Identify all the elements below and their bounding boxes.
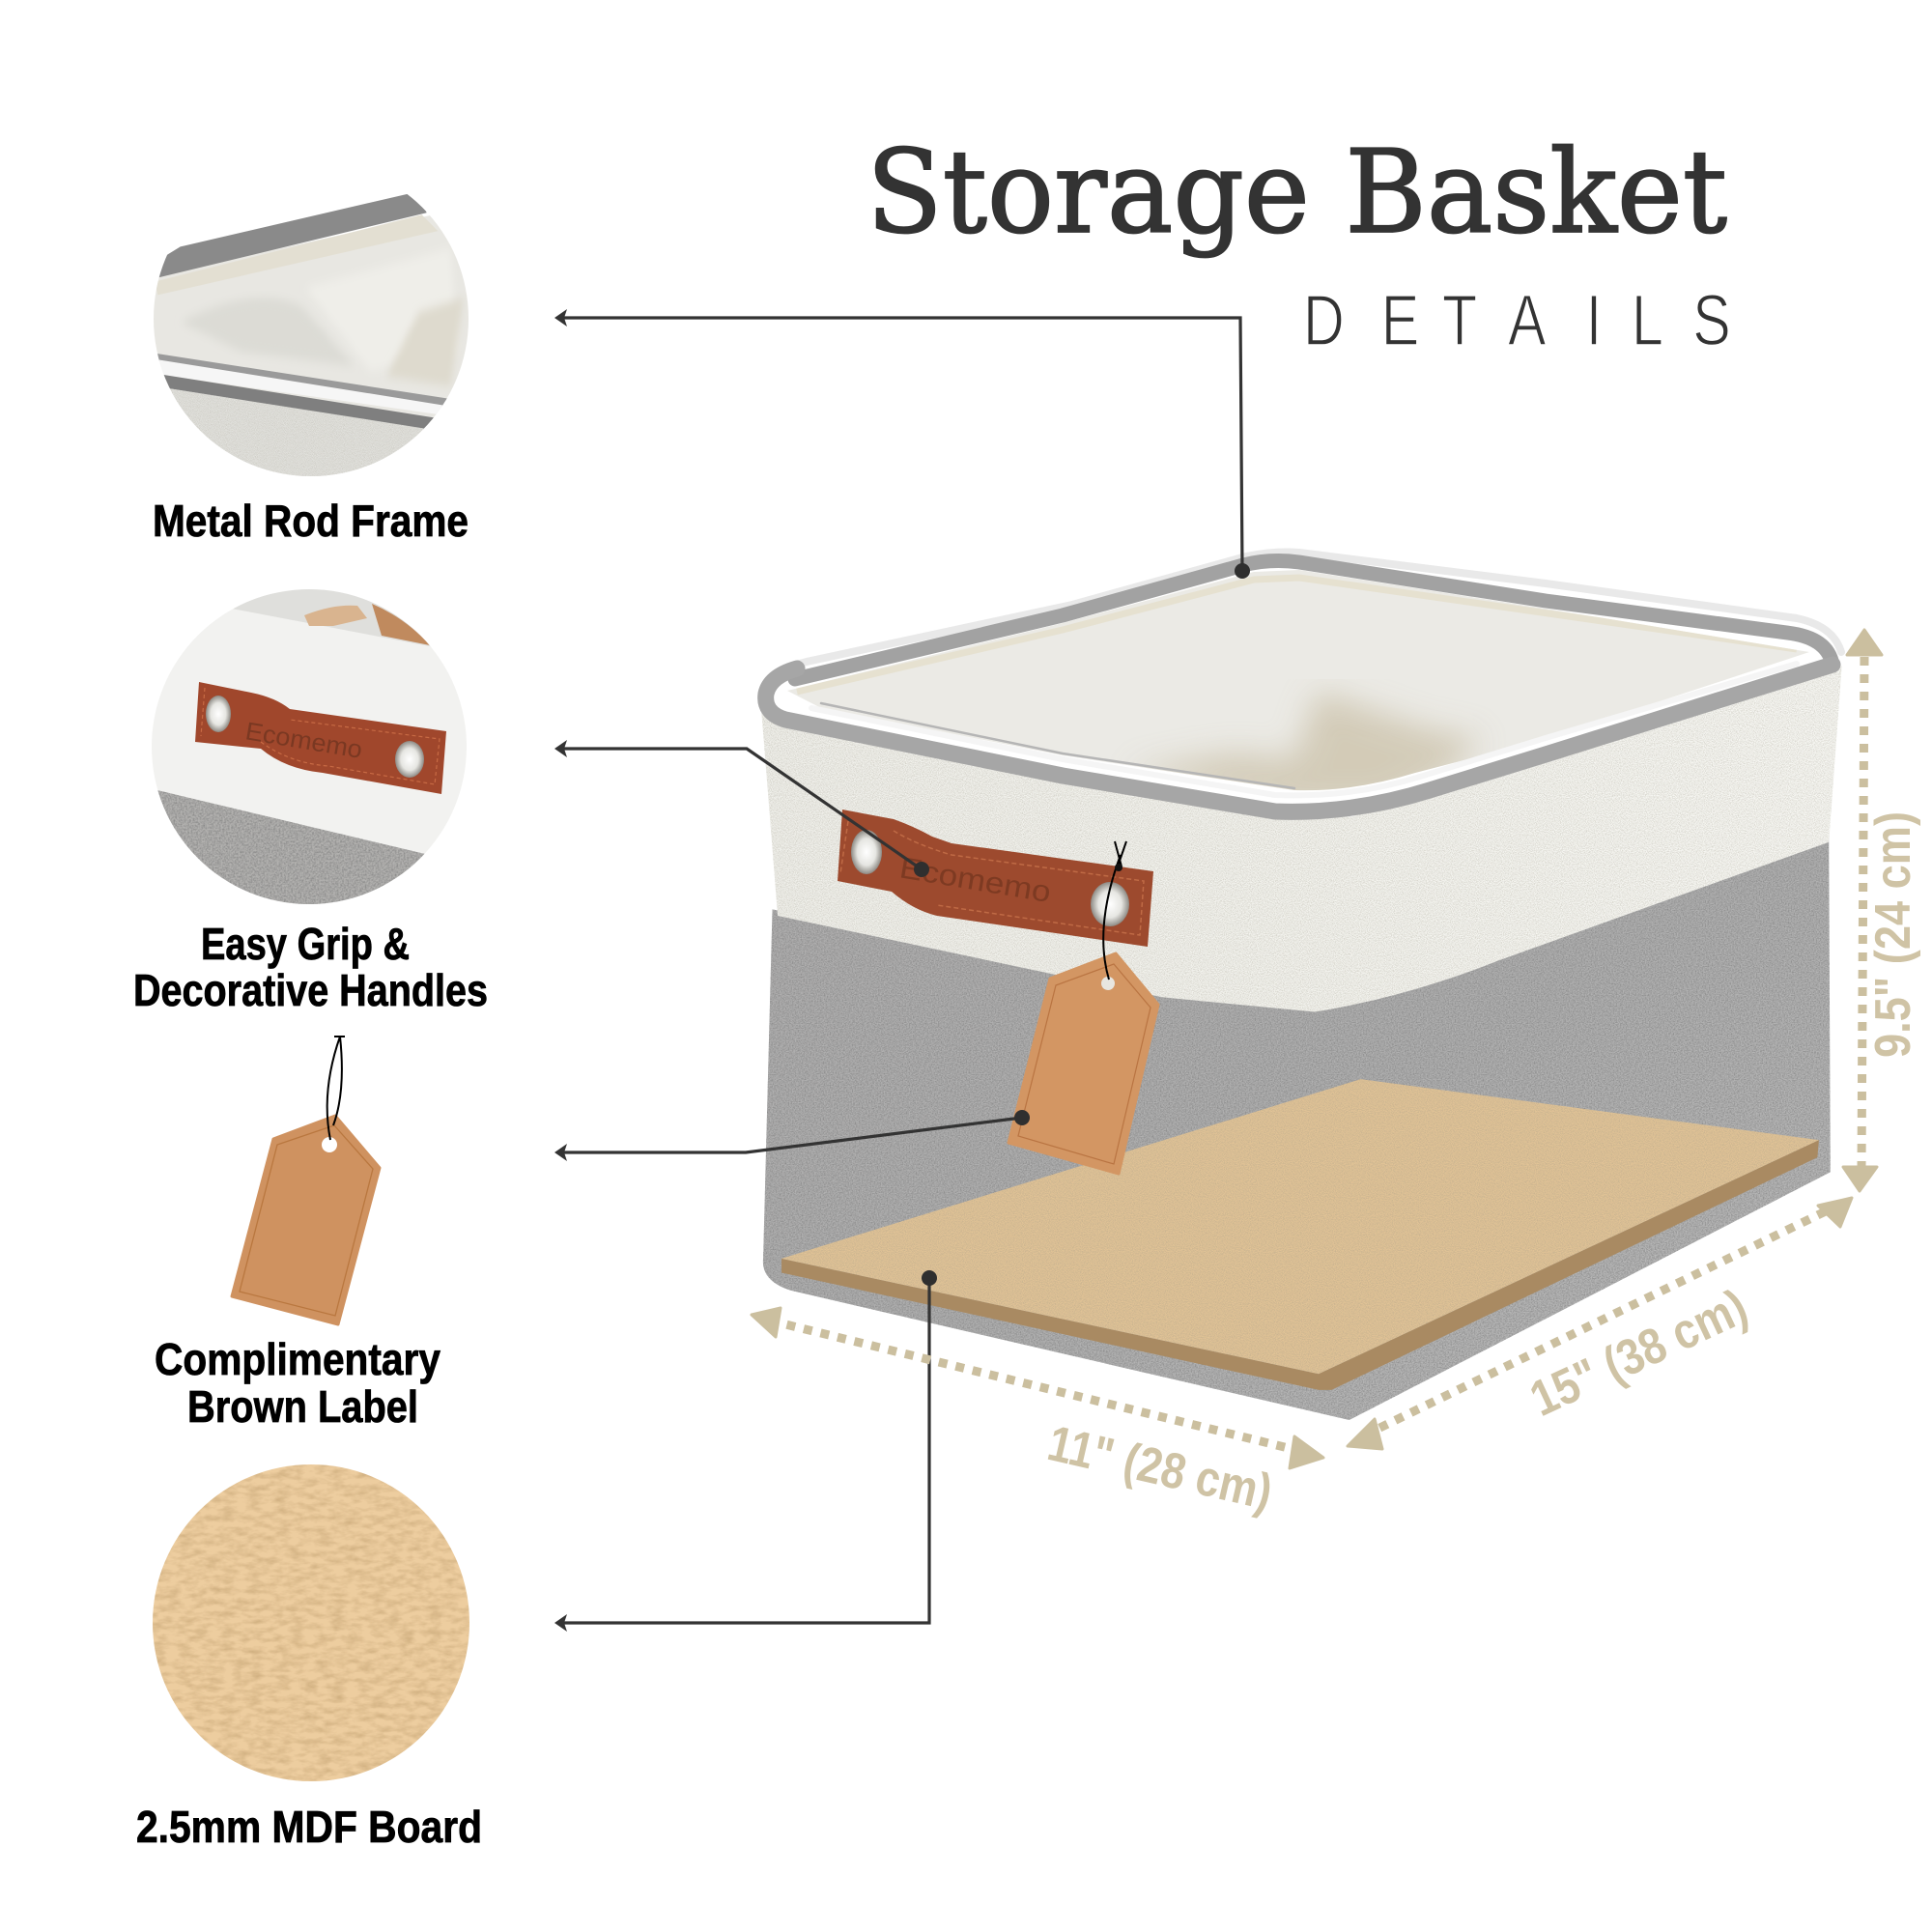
width text: 11" (28 cm): [1042, 1415, 1277, 1521]
label: MDF board: 2.5mm MDF Board: [136, 1802, 482, 1852]
detail circle: MDF: [153, 1464, 469, 1781]
label: handles: [133, 919, 488, 1015]
panel: metal rod frame: [145, 194, 483, 546]
basket fabric, local coordinates: [760, 666, 1842, 1420]
dimension: height: [1843, 630, 1921, 1191]
callout: label: [554, 1110, 1030, 1161]
dimension: width: [752, 1308, 1323, 1521]
basket white fabric band: [760, 666, 1842, 1012]
panel: MDF board: [136, 1464, 482, 1852]
label: metal rod frame: Metal Rod Frame: [153, 496, 469, 546]
dimension: length: [1348, 1198, 1852, 1449]
detail circle: handle: [152, 589, 467, 904]
brown hang tag: [1009, 841, 1158, 1174]
label: complimentary brown label: Complimentary: [155, 1334, 440, 1384]
label: complimentary brown label: Brown Label: [187, 1381, 418, 1432]
tag detail: [232, 1037, 380, 1324]
label: handles: Decorative Handles: [133, 965, 488, 1015]
label: handles: Easy Grip &: [201, 919, 410, 969]
basket grey fabric body: [763, 836, 1831, 1420]
title: Storage Basket: [867, 127, 1727, 260]
detail circle: metal rod: [154, 194, 469, 476]
height text: 9.5" (24 cm): [1865, 811, 1921, 1058]
length text: 15" (38 cm): [1522, 1279, 1756, 1428]
panel: basket illustration: [760, 553, 1842, 1420]
basket interior lining: [787, 570, 1809, 807]
callout: metal rod frame: [554, 309, 1250, 579]
detail circle: handle: Ecomemo: [243, 716, 364, 764]
callout: MDF board: [554, 1270, 937, 1632]
handle brand text: Ecomemo: [897, 850, 1053, 909]
panel: brown label: [155, 1037, 440, 1432]
handle grommets: [851, 830, 1129, 926]
basket metal rim: [766, 553, 1841, 811]
panel: handles: [133, 580, 488, 1015]
leather handle: [838, 810, 1153, 947]
subtitle: DETAILS: [1303, 281, 1731, 361]
MDF board: [781, 1079, 1819, 1390]
callout: handle: [554, 740, 929, 877]
label: complimentary brown label: [155, 1334, 440, 1432]
